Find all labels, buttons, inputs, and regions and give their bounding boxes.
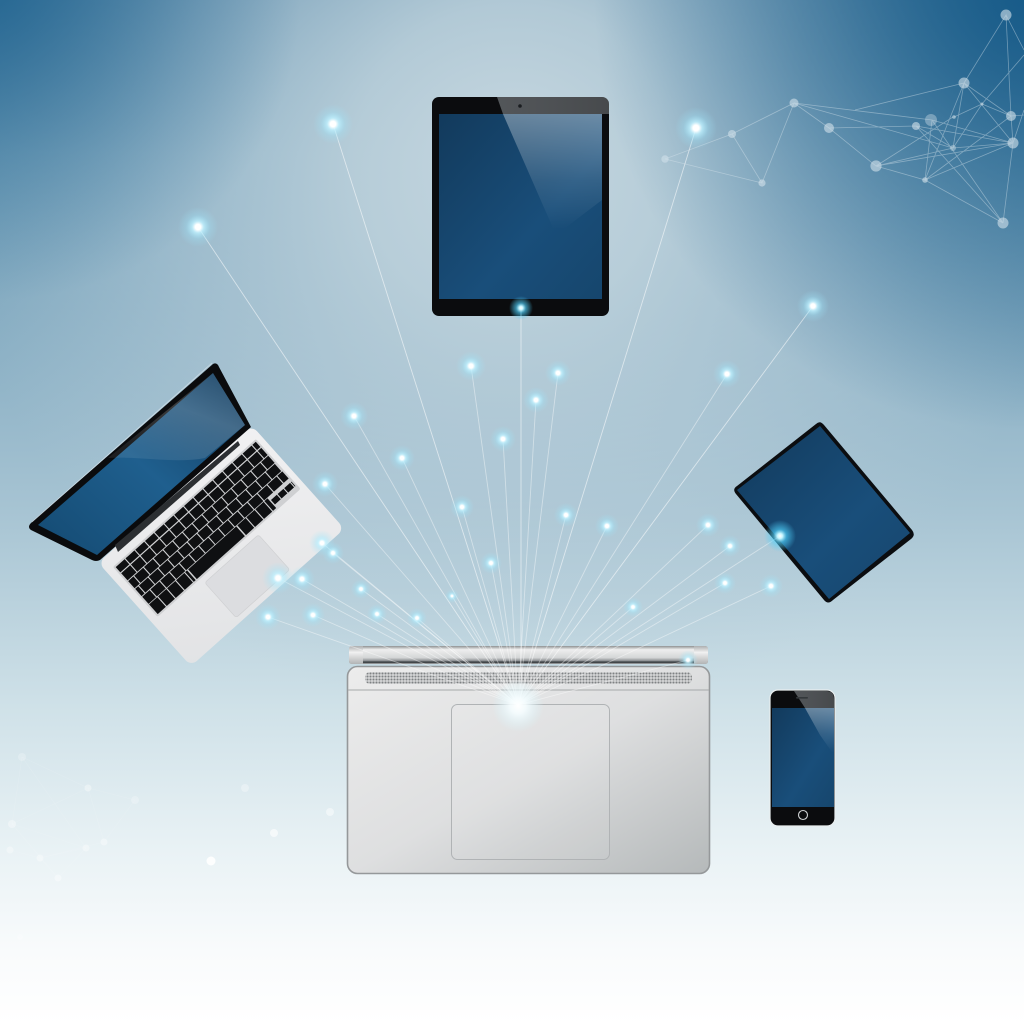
tablet screen xyxy=(439,114,602,299)
tablet screen xyxy=(737,426,910,599)
phone xyxy=(770,690,835,826)
phone speaker xyxy=(796,697,808,699)
phone glare xyxy=(805,708,834,755)
tablet top bezel highlight xyxy=(497,97,609,114)
laptop screen lid xyxy=(29,363,251,561)
laptop trackpad xyxy=(205,535,290,618)
hinge bar xyxy=(349,646,708,664)
laptop display glare xyxy=(108,373,245,460)
laptop base xyxy=(98,425,344,666)
hinge end caps xyxy=(349,646,708,664)
network mesh: bottom left xyxy=(6,753,334,940)
central light hub xyxy=(492,680,544,732)
laptop hinge xyxy=(115,441,240,552)
speaker grille xyxy=(365,672,692,684)
network mesh: top right xyxy=(661,10,1024,228)
keyboard well xyxy=(113,439,301,617)
tablet camera xyxy=(518,104,522,108)
base trackpad xyxy=(452,704,610,860)
left open laptop xyxy=(29,363,344,666)
right tilted tablet xyxy=(734,422,914,602)
tablet screen glare xyxy=(503,114,602,235)
base divider xyxy=(348,689,709,691)
glowing nodes xyxy=(178,104,829,670)
laptop display xyxy=(38,373,245,555)
phone bezel highlight xyxy=(794,691,834,708)
phone screen xyxy=(772,708,834,807)
top tablet xyxy=(432,97,609,316)
base body xyxy=(348,666,710,874)
light rays fan xyxy=(198,124,813,705)
laptop lid top edge highlight xyxy=(32,363,212,522)
keyboard keys xyxy=(118,444,293,609)
phone home button xyxy=(798,810,808,820)
main device: silver base xyxy=(348,646,710,874)
